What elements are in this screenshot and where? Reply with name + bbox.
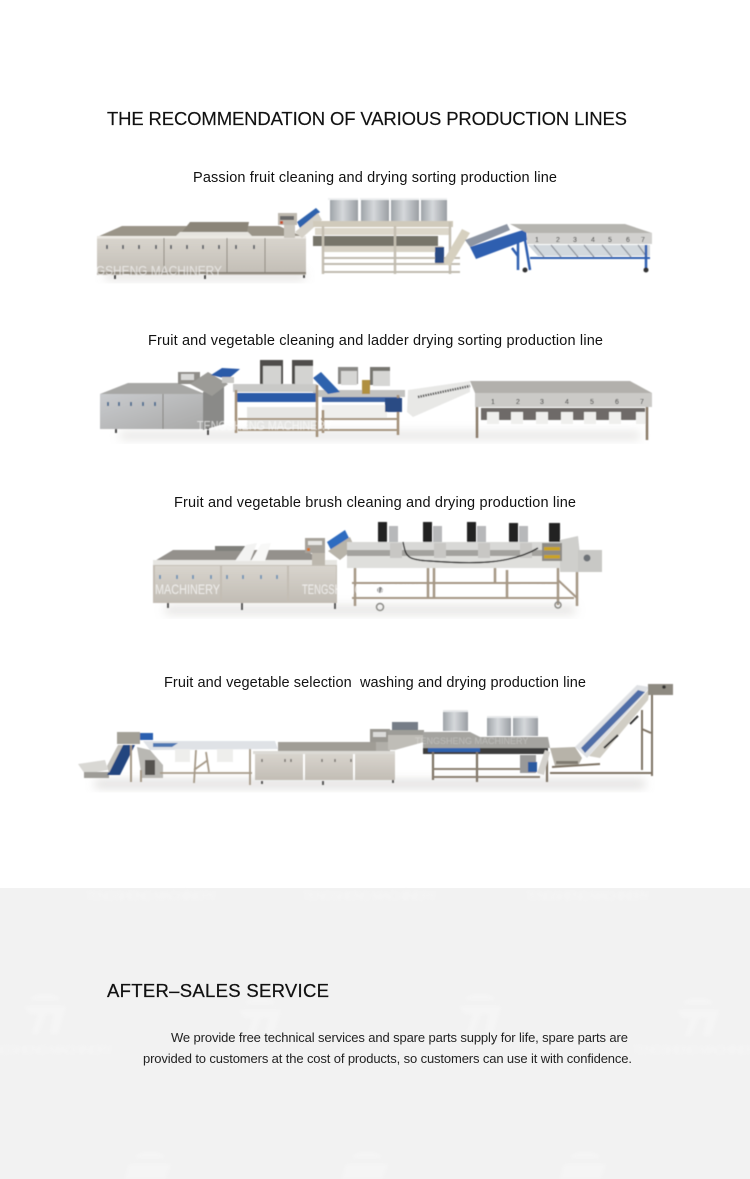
- faint watermark text: TENGSHENG MACHINERY: [525, 889, 650, 903]
- sorter numbers: 7: [640, 399, 644, 406]
- logo mark: bottom row 3: [560, 1152, 606, 1179]
- sorter numbers: 5: [608, 237, 612, 244]
- electrical box: [542, 543, 562, 561]
- floor shadow: [120, 432, 640, 439]
- panel: after-sales service: [0, 888, 750, 1179]
- watermark: TENGSHENG MACHINERY: [415, 736, 528, 746]
- section heading: AFTER–SALES SERVICE: [107, 980, 329, 1001]
- floor shadow: [105, 273, 305, 279]
- dryer with tubs: [423, 711, 550, 782]
- sorter numbers: 3: [573, 237, 577, 244]
- main title: THE RECOMMENDATION OF VARIOUS PRODUCTION LINES: [107, 108, 627, 129]
- watermarks: [155, 581, 548, 597]
- feed section: [388, 722, 424, 750]
- control box and belt: [305, 530, 355, 565]
- sorter numbers: 6: [626, 237, 630, 244]
- incline conveyor: [407, 381, 470, 417]
- watermarks: TEN: [520, 581, 548, 597]
- blue conveyor: [465, 224, 530, 272]
- sorter numbers: 1: [535, 237, 539, 244]
- watermark: TENGSHENG MACHINERY: [72, 263, 222, 278]
- floor shadow: [165, 606, 575, 614]
- watermark: TENGSHENG MACHINERY: [197, 418, 332, 433]
- sorter numbers: 3: [540, 399, 544, 406]
- washer tank: [97, 222, 306, 279]
- logo mark: middle row 1: [24, 994, 66, 1034]
- sorter numbers: 7: [641, 237, 645, 244]
- sorter numbers: [535, 237, 645, 244]
- logo mark: middle row 2: [239, 998, 281, 1036]
- heading: line 2: Fruit and vegetable cleaning and ladder drying sorting production line: [148, 333, 603, 349]
- watermarks: MACHINERY: [155, 581, 221, 597]
- faint watermark logos: [24, 994, 719, 1179]
- sorter numbers: 6: [615, 399, 619, 406]
- seven grade sorter: [470, 381, 652, 440]
- logo mark: bottom row 1: [125, 1152, 171, 1179]
- watermarks: TENGSHENG: [302, 581, 362, 597]
- heading: line 4: Fruit and vegetable selection washing and drying production line: [164, 675, 586, 691]
- sorter numbers: 4: [565, 399, 569, 406]
- control box and feed belt: [178, 368, 240, 396]
- faint watermark text: TENGSHENG MACHINERY: [302, 889, 437, 903]
- seven grade sorter: [510, 224, 652, 272]
- sorter numbers: 1: [491, 399, 495, 406]
- machine: ladder drying line: [100, 360, 652, 440]
- washer tank: [253, 729, 395, 785]
- large blue and steel incline: [550, 684, 673, 776]
- white brushes: [235, 543, 271, 561]
- faint watermark text: [0, 889, 750, 1057]
- sorter numbers: 5: [590, 399, 594, 406]
- machine: selection washing drying line: [78, 684, 673, 787]
- logo mark: bottom row 2: [342, 1152, 388, 1179]
- logo mark: middle row 3: [459, 994, 501, 1034]
- sorter numbers: 4: [591, 237, 595, 244]
- machine: passion fruit line: [72, 198, 652, 279]
- sorter numbers: [491, 399, 644, 406]
- grey background: [0, 888, 750, 1179]
- heading: line 3: Fruit and vegetable brush cleaning and drying production line: [174, 495, 576, 511]
- ladder dryer with fans: [233, 360, 405, 437]
- air dryer with four tubs: [313, 198, 470, 274]
- inspection table: [143, 741, 278, 785]
- floor shadow: [95, 781, 645, 787]
- logo mark: middle row 4: [677, 998, 719, 1036]
- sorter numbers: 2: [556, 237, 560, 244]
- section body text: We provide free technical services and spare parts supply for life, spare parts are: [171, 1030, 628, 1045]
- washer tank: [100, 383, 224, 435]
- power cable: [403, 542, 538, 563]
- faint watermark text: TENGSHENG MACHINERY: [85, 889, 217, 903]
- machine: brush cleaning line: [153, 522, 602, 614]
- heading: line 1: Passion fruit cleaning and drying sorting production line: [193, 170, 557, 186]
- hopper and blue incline: [78, 732, 163, 782]
- air dryer: [347, 522, 602, 610]
- sorter numbers: 2: [516, 399, 520, 406]
- brush washer: [153, 546, 337, 610]
- control box and feed belt: [278, 208, 322, 238]
- section body text: provided to customers at the cost of products, so customers can use it with confidence.: [143, 1051, 632, 1066]
- watermarks: MACHINE: [370, 581, 425, 597]
- section body text: [143, 1030, 632, 1066]
- hopper: [550, 747, 582, 766]
